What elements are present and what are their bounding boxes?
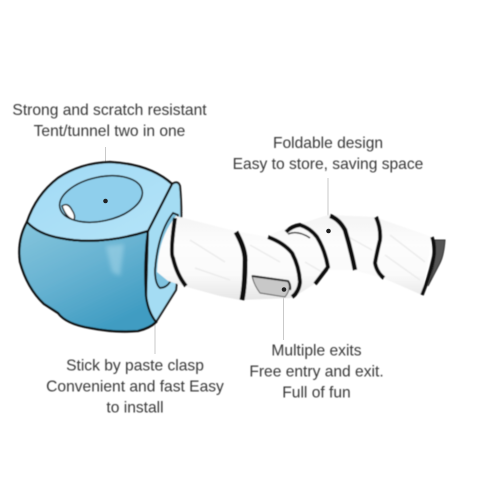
tunnel inner fold [288, 233, 310, 238]
front panel [19, 222, 156, 332]
callout: strong and scratch resistant: Tent/tunnel two in one [34, 123, 185, 140]
illustration: cat tent and tunnel [19, 162, 445, 332]
callout: strong and scratch resistant: Strong and scratch resistant [12, 102, 207, 119]
side exit flap [252, 276, 290, 297]
fabric highlight [106, 244, 124, 276]
tunnel band 3 [268, 237, 300, 297]
top opening [55, 169, 147, 229]
leader line: foldable [327, 178, 329, 230]
tunnel band 2 [236, 232, 245, 300]
callout: paste clasp: to install [106, 400, 164, 416]
leader line: top left [104, 147, 106, 200]
inner side hole [62, 205, 75, 220]
callout: multiple exits: Free entry and exit. [249, 364, 384, 380]
marker dots [103, 199, 331, 292]
callout: multiple exits: Full of fun [282, 384, 351, 402]
tunnel band 5 [330, 216, 355, 270]
tunnel band 6 [375, 217, 384, 278]
side opening [155, 213, 178, 288]
leader line: multiple exits [282, 290, 284, 340]
callout: foldable design: Foldable design [273, 135, 383, 152]
callout: paste clasp: Stick by paste clasp [66, 358, 204, 374]
callout: foldable design: Easy to store, saving space [233, 156, 423, 173]
leader line: paste clasp [154, 322, 156, 354]
tunnel end ring [422, 237, 445, 295]
tunnel creases [190, 235, 425, 280]
side panel [146, 182, 181, 322]
callout: multiple exits: Multiple exits [271, 342, 362, 360]
callout: paste clasp: Convenient and fast Easy [46, 378, 224, 396]
tunnel body [157, 215, 432, 300]
top panel [27, 162, 172, 241]
tunnel band 4 [286, 225, 328, 284]
tunnel band 1 [172, 218, 186, 286]
tent cube [19, 162, 181, 332]
